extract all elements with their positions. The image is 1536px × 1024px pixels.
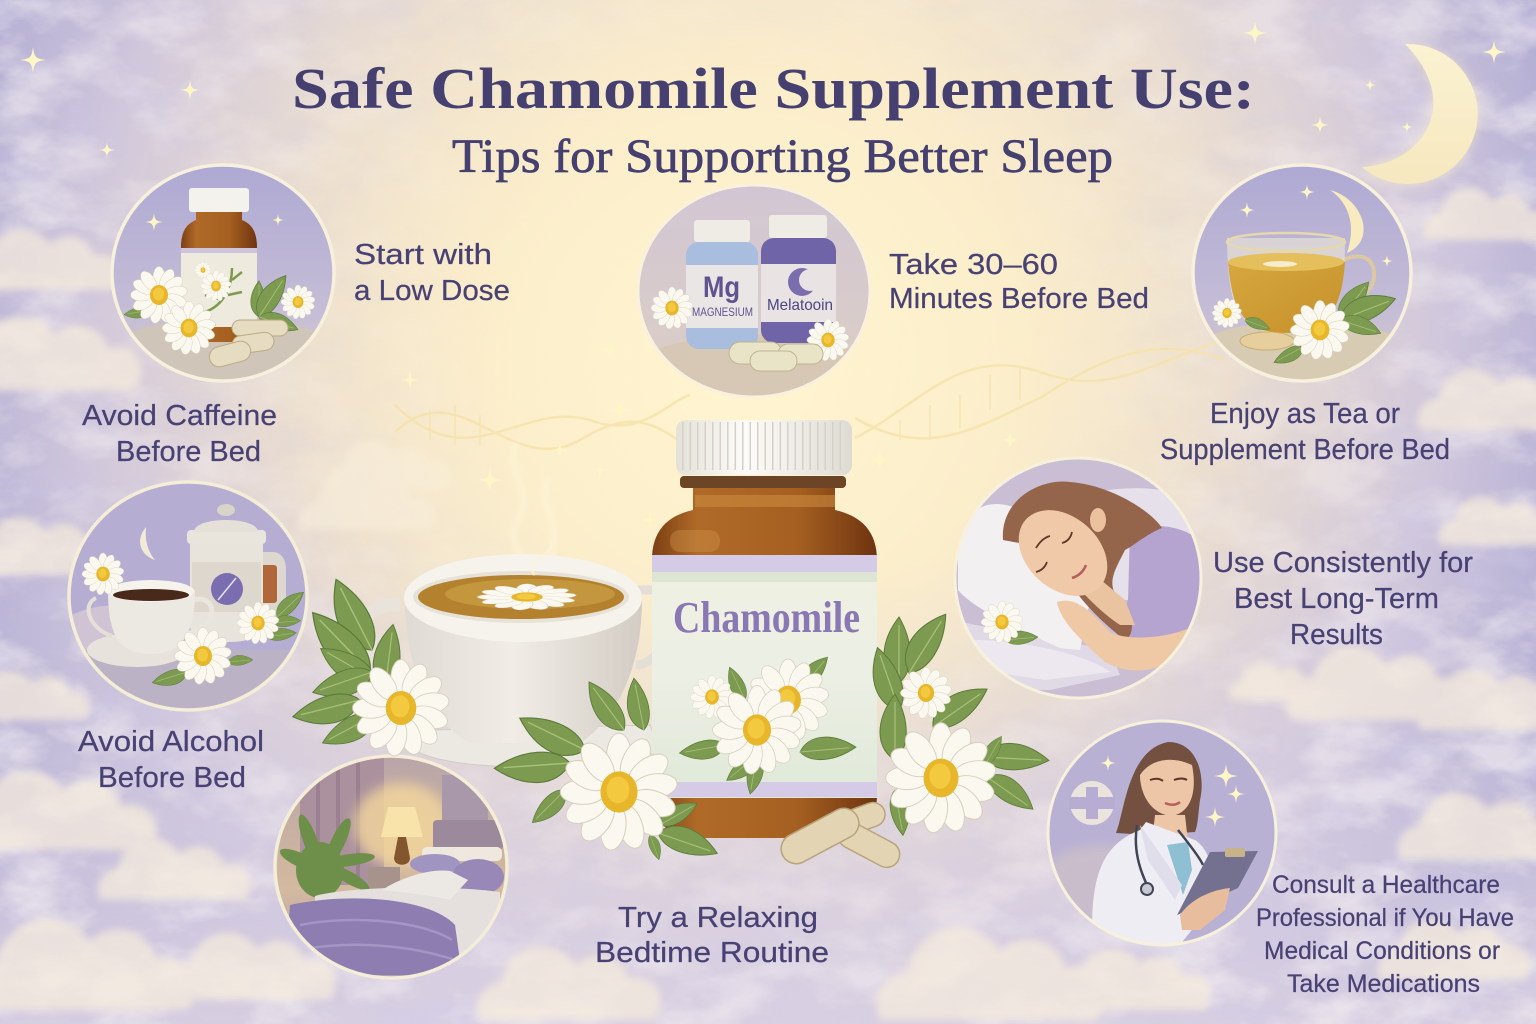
panel: tea glass illustration (1190, 165, 1414, 389)
panel: magnesium and melatonin bottles: Melatooin (767, 297, 833, 314)
panel: coffee and alcohol illustration (60, 482, 320, 720)
text: try a relaxing bedtime routine: Try a Relaxing (618, 902, 818, 934)
icon: crescent moon (1362, 44, 1478, 184)
text: take 30-60 minutes before bed: Take 30–60 (889, 249, 1058, 281)
text: consult a healthcare professional: Consult a Healthcare (1272, 871, 1500, 899)
panel: magnesium and melatonin bottles: MAGNESIUM (692, 305, 753, 319)
decorative DNA helix (395, 340, 1225, 449)
text: take 30-60 minutes before bed: Minutes Before Bed (889, 283, 1149, 315)
text: avoid alcohol before bed (78, 726, 264, 794)
title (292, 56, 1255, 183)
illustration: chamomile supplement bottle (652, 420, 877, 838)
illustration: front flower and leaves (493, 676, 722, 864)
text: take 30-60 minutes before bed (889, 249, 1149, 315)
panel: magnesium and melatonin bottles: Mg (703, 271, 740, 304)
text: use consistently (1213, 547, 1473, 651)
icon: rising steam (513, 445, 554, 570)
text: avoid caffeine before bed: Avoid Caffeine (82, 400, 277, 432)
panel: woman sleeping illustration (950, 458, 1202, 698)
text: use consistently: Results (1290, 619, 1383, 651)
text: start with a low dose (354, 239, 510, 307)
text: avoid alcohol before bed: Avoid Alcohol (78, 726, 264, 758)
text: try a relaxing bedtime routine (595, 902, 829, 969)
panel: healthcare professional illustration (1035, 721, 1276, 945)
title: Tips for Supporting Better Sleep (452, 130, 1113, 183)
text: enjoy as tea or supplement: Enjoy as Tea or (1210, 398, 1400, 430)
illustration: leaves and flower left of cup (290, 573, 450, 757)
illustration: capsules (776, 799, 904, 872)
text: avoid caffeine before bed (82, 400, 277, 468)
text: consult a healthcare professional: Take Medications (1287, 970, 1480, 998)
text: avoid alcohol before bed: Before Bed (98, 762, 246, 794)
label flowers (678, 651, 857, 796)
text: avoid caffeine before bed: Before Bed (116, 436, 261, 468)
text: use consistently: Best Long-Term (1234, 583, 1439, 615)
text: enjoy as tea or supplement (1160, 398, 1450, 466)
illustration: chamomile tea cup (359, 540, 668, 767)
text: use consistently: Use Consistently for (1213, 547, 1473, 579)
text: consult a healthcare professional (1256, 871, 1514, 998)
illustration: right leaves and flowers (863, 606, 1050, 837)
panel: low dose bottle illustration (110, 165, 340, 393)
text: consult a healthcare professional: Medical Conditions or (1264, 937, 1500, 965)
title: Safe Chamomile Supplement Use: (292, 56, 1255, 121)
panel: magnesium and melatonin bottles (634, 185, 874, 405)
panel: bedroom illustration (275, 755, 507, 978)
text: start with a low dose: Start with (354, 239, 492, 271)
bottle label text: Chamomile (673, 593, 860, 642)
text: start with a low dose: a Low Dose (354, 275, 510, 307)
text: consult a healthcare professional: Professional if You Have (1256, 904, 1514, 932)
text: enjoy as tea or supplement: Supplement Before Bed (1160, 434, 1450, 466)
sparkles (20, 21, 1506, 528)
text: try a relaxing bedtime routine: Bedtime Routine (595, 937, 829, 969)
